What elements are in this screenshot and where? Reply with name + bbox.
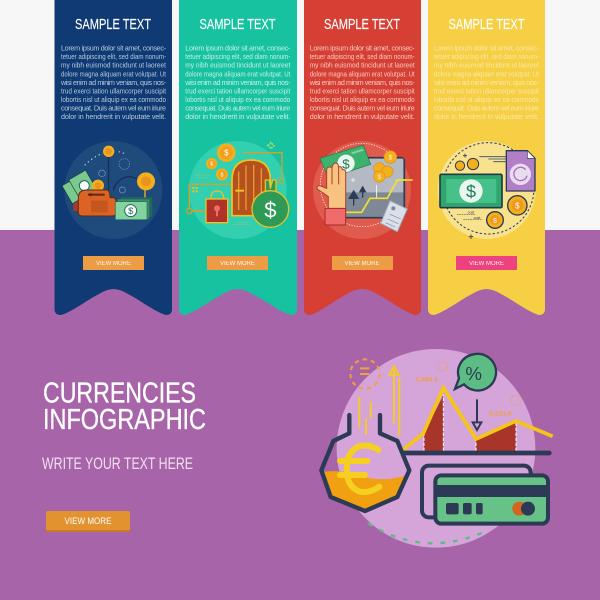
text block: yellow banner: wisi enim ad minim veniam, quis nos- — [433, 78, 540, 87]
text block: teal banner: lobortis nisl ut aliquip ex ea commodo — [185, 95, 290, 104]
text block: teal banner: dolore magna aliquam erat volutpat. Ut — [185, 69, 290, 78]
button: yellow view more: VIEW MORE — [469, 261, 504, 267]
text block: red banner: tetuer adipiscing elit, sed diam nonum- — [310, 52, 415, 61]
icon: hand, money and rising chart — [313, 141, 413, 239]
icon: banknote, document and coins: cost — [468, 211, 474, 215]
heading: yellow banner: SAMPLE TEXT — [448, 17, 525, 33]
illustration: currencies chart, euro flask and credit card — [321, 349, 553, 548]
icon: vault door, lock and money bag: $ — [210, 162, 213, 168]
icon: dashed coin — [350, 359, 521, 405]
button: navy view more: VIEW MORE — [96, 261, 131, 267]
icon: banknote, document and coins: $ — [515, 201, 520, 210]
panel: teal banner — [179, 0, 297, 315]
text block: red banner: lobortis nisl ut aliquip ex ea commodo — [310, 95, 415, 104]
button: main view more: VIEW MORE — [64, 516, 112, 526]
icon: banknote, document and coins — [438, 141, 536, 239]
text block: teal banner: tetuer adipiscing elit, sed diam nonum- — [185, 52, 291, 61]
icon: vault door, lock and money bag: $ — [224, 149, 229, 158]
button: yellow view more — [456, 256, 517, 270]
chart labels: 0,231.4 — [489, 410, 512, 417]
text block: teal banner: trud exerci tation ullamcorper suscipit — [185, 86, 290, 96]
text block: red banner: trud exerci tation ullamcorper suscipit — [310, 86, 415, 96]
text block: navy banner: trud exerci tation ullamcorper suscipit — [61, 86, 166, 96]
button: teal view more: VIEW MORE — [220, 261, 255, 267]
text block: teal banner — [184, 44, 291, 121]
icon: percent bubble — [455, 354, 496, 391]
text block: yellow banner: tetuer adipiscing elit, sed diam nonum- — [434, 52, 540, 61]
text block: navy banner: tetuer adipiscing elit, sed diam nonum- — [61, 52, 167, 61]
text block: navy banner: lobortis nisl ut aliquip ex ea commodo — [61, 95, 166, 104]
subtitle: WRITE YOUR TEXT HERE — [42, 455, 193, 473]
text block: yellow banner: my nibh euismod tincidunt ut laoreet — [434, 60, 539, 70]
title — [43, 378, 206, 436]
icon: wallet and money: $ — [128, 206, 134, 216]
icon: vault door, lock and money bag: $ — [264, 198, 276, 223]
icon: hand, money and rising chart: $ — [342, 156, 350, 171]
text block: navy banner: my nibh euismod tincidunt ut laoreet — [61, 60, 166, 70]
icon: banknote, document and coins: $ — [493, 217, 497, 224]
button: red view more — [332, 256, 393, 270]
text block: yellow banner: trud exerci tation ullamcorper suscipit — [434, 86, 539, 96]
button: red view more: VIEW MORE — [344, 261, 380, 267]
text block: red banner: dolore magna aliquam erat volutpat. Ut — [310, 69, 415, 78]
heading: teal banner: SAMPLE TEXT — [200, 17, 276, 33]
text block: teal banner: dolor in hendrerit in vulputate velit. — [185, 112, 290, 121]
icon: hand, money and rising chart: $ — [377, 174, 381, 181]
text block: navy banner — [60, 44, 167, 121]
text block: teal banner: consequat. Duis autem vel eum iriure — [185, 104, 290, 113]
text block: yellow banner — [433, 44, 540, 121]
panel: red banner — [304, 0, 421, 315]
text block: navy banner: Lorem ipsum dolor sit amet, consec- — [61, 44, 167, 52]
text block: teal banner: my nibh euismod tincidunt ut laoreet — [185, 60, 290, 70]
heading: navy banner: SAMPLE TEXT — [75, 17, 151, 33]
text block: navy banner: dolor in hendrerit in vulputate velit. — [61, 112, 166, 121]
text block: red banner: my nibh euismod tincidunt ut laoreet — [310, 60, 415, 70]
background circle — [337, 349, 535, 548]
icon: credit cards — [422, 466, 548, 524]
text block: yellow banner: Lorem ipsum dolor sit amet, consec- — [434, 44, 540, 52]
text block: yellow banner: consequat. Duis autem vel eum iriure — [434, 104, 539, 113]
panel: navy banner — [54, 0, 172, 315]
arrow: down — [473, 399, 481, 430]
button: teal view more — [207, 256, 268, 270]
dashed arc — [368, 523, 485, 543]
text block: navy banner: dolore magna aliquam erat volutpat. Ut — [61, 69, 166, 78]
icon: percent bubble: % — [465, 363, 482, 384]
icon: banknote, document and coins: cost — [474, 216, 480, 220]
panel: yellow banner — [428, 0, 545, 315]
title: INFOGRAPHIC — [43, 404, 206, 436]
text block: navy banner: wisi enim ad minim veniam, quis nos- — [60, 78, 167, 87]
text block: yellow banner: dolore magna aliquam erat volutpat. Ut — [434, 69, 539, 78]
arrow: up — [359, 366, 399, 436]
text block: red banner: consequat. Duis autem vel eum iriure — [310, 104, 415, 113]
text block: red banner: dolor in hendrerit in vulputate velit. — [310, 112, 415, 121]
text block: teal banner: wisi enim ad minim veniam, quis nos- — [184, 78, 291, 87]
text block: yellow banner: lobortis nisl ut aliquip ex ea commodo — [434, 95, 539, 104]
chart labels — [416, 377, 512, 417]
text block: teal banner: Lorem ipsum dolor sit amet, consec- — [185, 44, 291, 52]
button: main view more — [46, 511, 130, 532]
icon: banknote, document and coins: $ — [466, 181, 476, 201]
button: navy view more — [83, 256, 144, 270]
icon: euro flask — [321, 415, 409, 511]
text block: red banner: Lorem ipsum dolor sit amet, consec- — [310, 44, 415, 52]
icon: vault door, lock and money bag — [187, 141, 289, 239]
text block: red banner — [309, 44, 415, 121]
text block: red banner: wisi enim ad minim veniam, quis nos- — [309, 78, 415, 87]
icon: wallet and money — [62, 141, 162, 239]
text block: navy banner: consequat. Duis autem vel eum iriure — [61, 104, 166, 113]
icon: vault door, lock and money bag: $ — [221, 172, 224, 178]
chart: red areas and yellow line — [402, 388, 553, 453]
chart labels: 1,465.4 — [416, 377, 438, 384]
text block: yellow banner: dolor in hendrerit in vulputate velit. — [434, 112, 539, 121]
icon: hand, money and rising chart: $ — [388, 154, 392, 161]
heading: red banner: SAMPLE TEXT — [324, 17, 400, 33]
title: CURRENCIES — [43, 378, 196, 410]
